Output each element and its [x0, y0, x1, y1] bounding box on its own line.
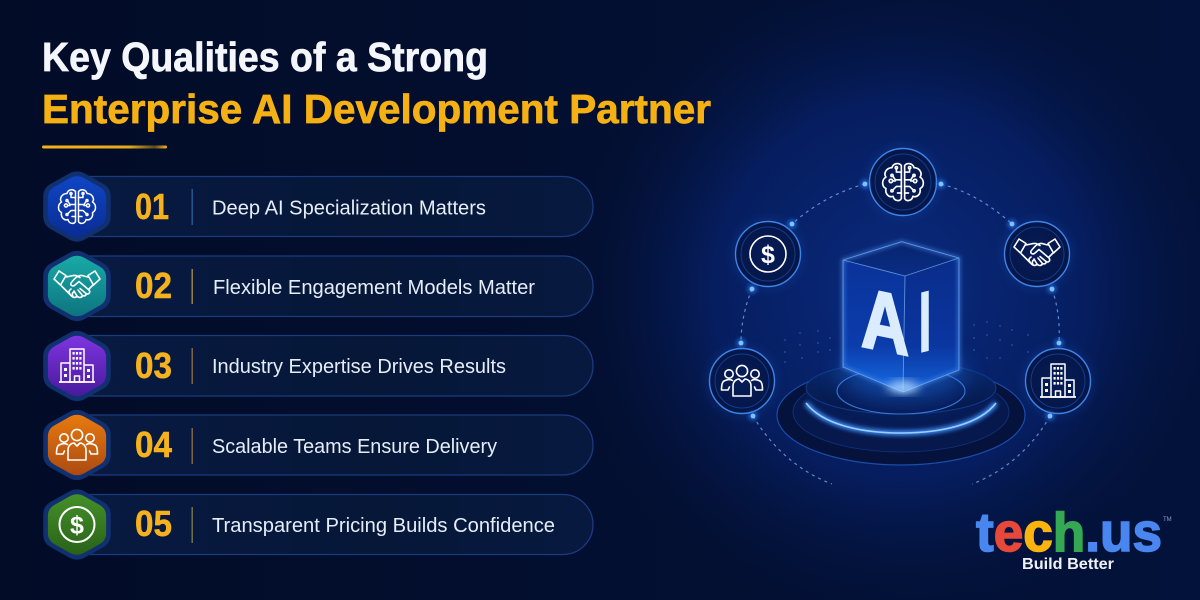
icon: brain hexagon [43, 171, 111, 242]
glowing platform [777, 362, 1025, 465]
row 02 [43, 251, 593, 321]
dashed orbit connectors [741, 184, 1059, 484]
node: buildings [1022, 345, 1094, 417]
icon: buildings hexagon [43, 331, 111, 401]
AI label on cube: I [919, 274, 931, 371]
logo tagline: Build Better [1022, 556, 1114, 573]
title line 2: Enterprise AI Development Partner [42, 86, 711, 132]
number 03: 03 [135, 345, 172, 386]
AI label on cube: A [861, 270, 909, 373]
AI hub diagram [706, 145, 1094, 484]
node: team [706, 345, 778, 417]
icon: dollar hexagon [43, 489, 111, 560]
trademark mark: TM [1163, 517, 1172, 523]
label 01: Deep AI Specialization Matters [212, 198, 486, 220]
node: brain [866, 145, 940, 219]
glass cube [843, 242, 959, 392]
number 05: 05 [135, 503, 172, 544]
logo [976, 501, 1172, 573]
number 02: 02 [135, 265, 172, 306]
icon: team hexagon [43, 410, 111, 480]
number 04: 04 [135, 424, 172, 465]
row 01 [43, 171, 593, 242]
row 04 [43, 410, 593, 480]
node: dollar [732, 218, 804, 290]
label 05: Transparent Pricing Builds Confidence [212, 515, 555, 537]
row 03 [43, 331, 593, 401]
node: dollar: $ [761, 241, 775, 269]
number 01: 01 [135, 186, 169, 227]
background particles [784, 321, 1029, 363]
title [42, 34, 711, 148]
title line 1: Key Qualities of a Strong [42, 34, 488, 80]
connector dots [736, 180, 1064, 420]
title underline [42, 146, 167, 148]
list of qualities [43, 171, 593, 560]
label 04: Scalable Teams Ensure Delivery [212, 436, 497, 458]
node: handshake [1001, 218, 1073, 290]
cube glow [841, 351, 965, 399]
icon: dollar hexagon: $ [70, 512, 84, 540]
label 03: Industry Expertise Drives Results [212, 356, 506, 378]
icon: handshake hexagon [43, 251, 111, 321]
label 02: Flexible Engagement Models Matter [213, 277, 535, 299]
row 05 [43, 489, 593, 560]
logo wordmark: tech.us [976, 501, 1162, 563]
